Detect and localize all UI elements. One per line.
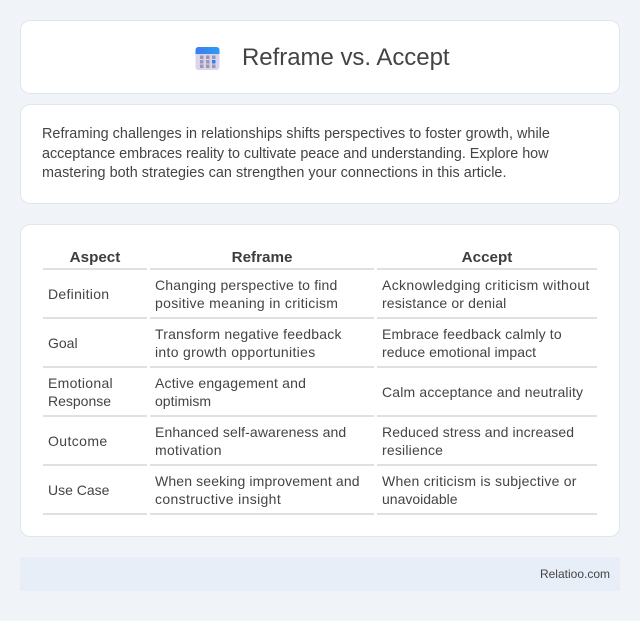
cell: Outcome Accept: Reduced stress and increased [382, 424, 574, 440]
column heading: Reframe: Reframe [232, 249, 292, 266]
cell: Use Case Accept: unavoidable [382, 491, 458, 507]
footer text: Relatioo.com [540, 567, 610, 581]
cell: Goal Accept: Embrace feedback calmly to [382, 326, 562, 342]
cell: Definition Reframe [155, 277, 338, 311]
icon: calendar [196, 47, 220, 70]
column heading: Accept: Accept [462, 249, 512, 266]
cell: Use Case Reframe: constructive insight [155, 491, 281, 507]
cell: Emotional Response Accept: Calm acceptance and neutrality [382, 384, 583, 400]
panel: comparison table card [20, 224, 620, 537]
column heading: Aspect: Aspect [70, 249, 120, 266]
panel: introduction [20, 104, 620, 204]
cell: Outcome Accept: resilience [382, 442, 443, 458]
cell: Definition Reframe: positive meaning in criticism [155, 295, 338, 311]
cell: Outcome Reframe: motivation [155, 442, 222, 458]
cell: Outcome Accept [382, 424, 574, 458]
comparison table [43, 249, 597, 515]
text block: introduction: mastering both strategies can strengthen your connections in this article. [42, 165, 507, 181]
cell: Definition Reframe: Changing perspective to find [155, 277, 338, 293]
cell: Definition Accept [382, 277, 590, 311]
cell: Outcome Reframe: Enhanced self-awareness and [155, 424, 346, 440]
cell: Emotional Response Reframe: optimism [155, 393, 211, 409]
row: Emotional Response: Emotional [48, 375, 113, 391]
cell: Definition Accept: Acknowledging criticism without [382, 277, 590, 293]
cell: Goal Accept [382, 326, 562, 360]
cell: Emotional Response Reframe: Active engagement and [155, 375, 306, 391]
text block: introduction [42, 126, 550, 181]
cell: Definition Accept: resistance or denial [382, 295, 506, 311]
cell: Goal Reframe [155, 326, 342, 360]
cell: Outcome Reframe [155, 424, 346, 458]
cell: Use Case Accept: When criticism is subjective or [382, 473, 577, 489]
row: Outcome: Outcome [48, 433, 108, 449]
text block: introduction: acceptance embraces reality to cultivate peace and understanding. Explore how [42, 146, 548, 162]
cell: Goal Accept: reduce emotional impact [382, 344, 536, 360]
row: Use Case: Use Case [48, 482, 109, 498]
cell: Use Case Reframe [155, 473, 360, 507]
text block: introduction: Reframing challenges in relationships shifts perspectives to foster growth, while [42, 126, 550, 142]
cell: Goal Reframe: Transform negative feedback [155, 326, 342, 342]
cell: Goal Reframe: into growth opportunities [155, 344, 316, 360]
cell: Use Case Reframe: When seeking improvement and [155, 473, 360, 489]
cell: Use Case Accept [382, 473, 577, 507]
panel: title card [20, 20, 620, 94]
row: Emotional Response: Response [48, 393, 111, 409]
cell: Emotional Response Reframe [155, 375, 306, 409]
row: Goal: Goal [48, 335, 78, 351]
footer bar [20, 557, 620, 591]
row: Emotional Response [48, 375, 113, 409]
title: Reframe vs. Accept [242, 44, 450, 71]
row: Definition: Definition [48, 286, 109, 302]
